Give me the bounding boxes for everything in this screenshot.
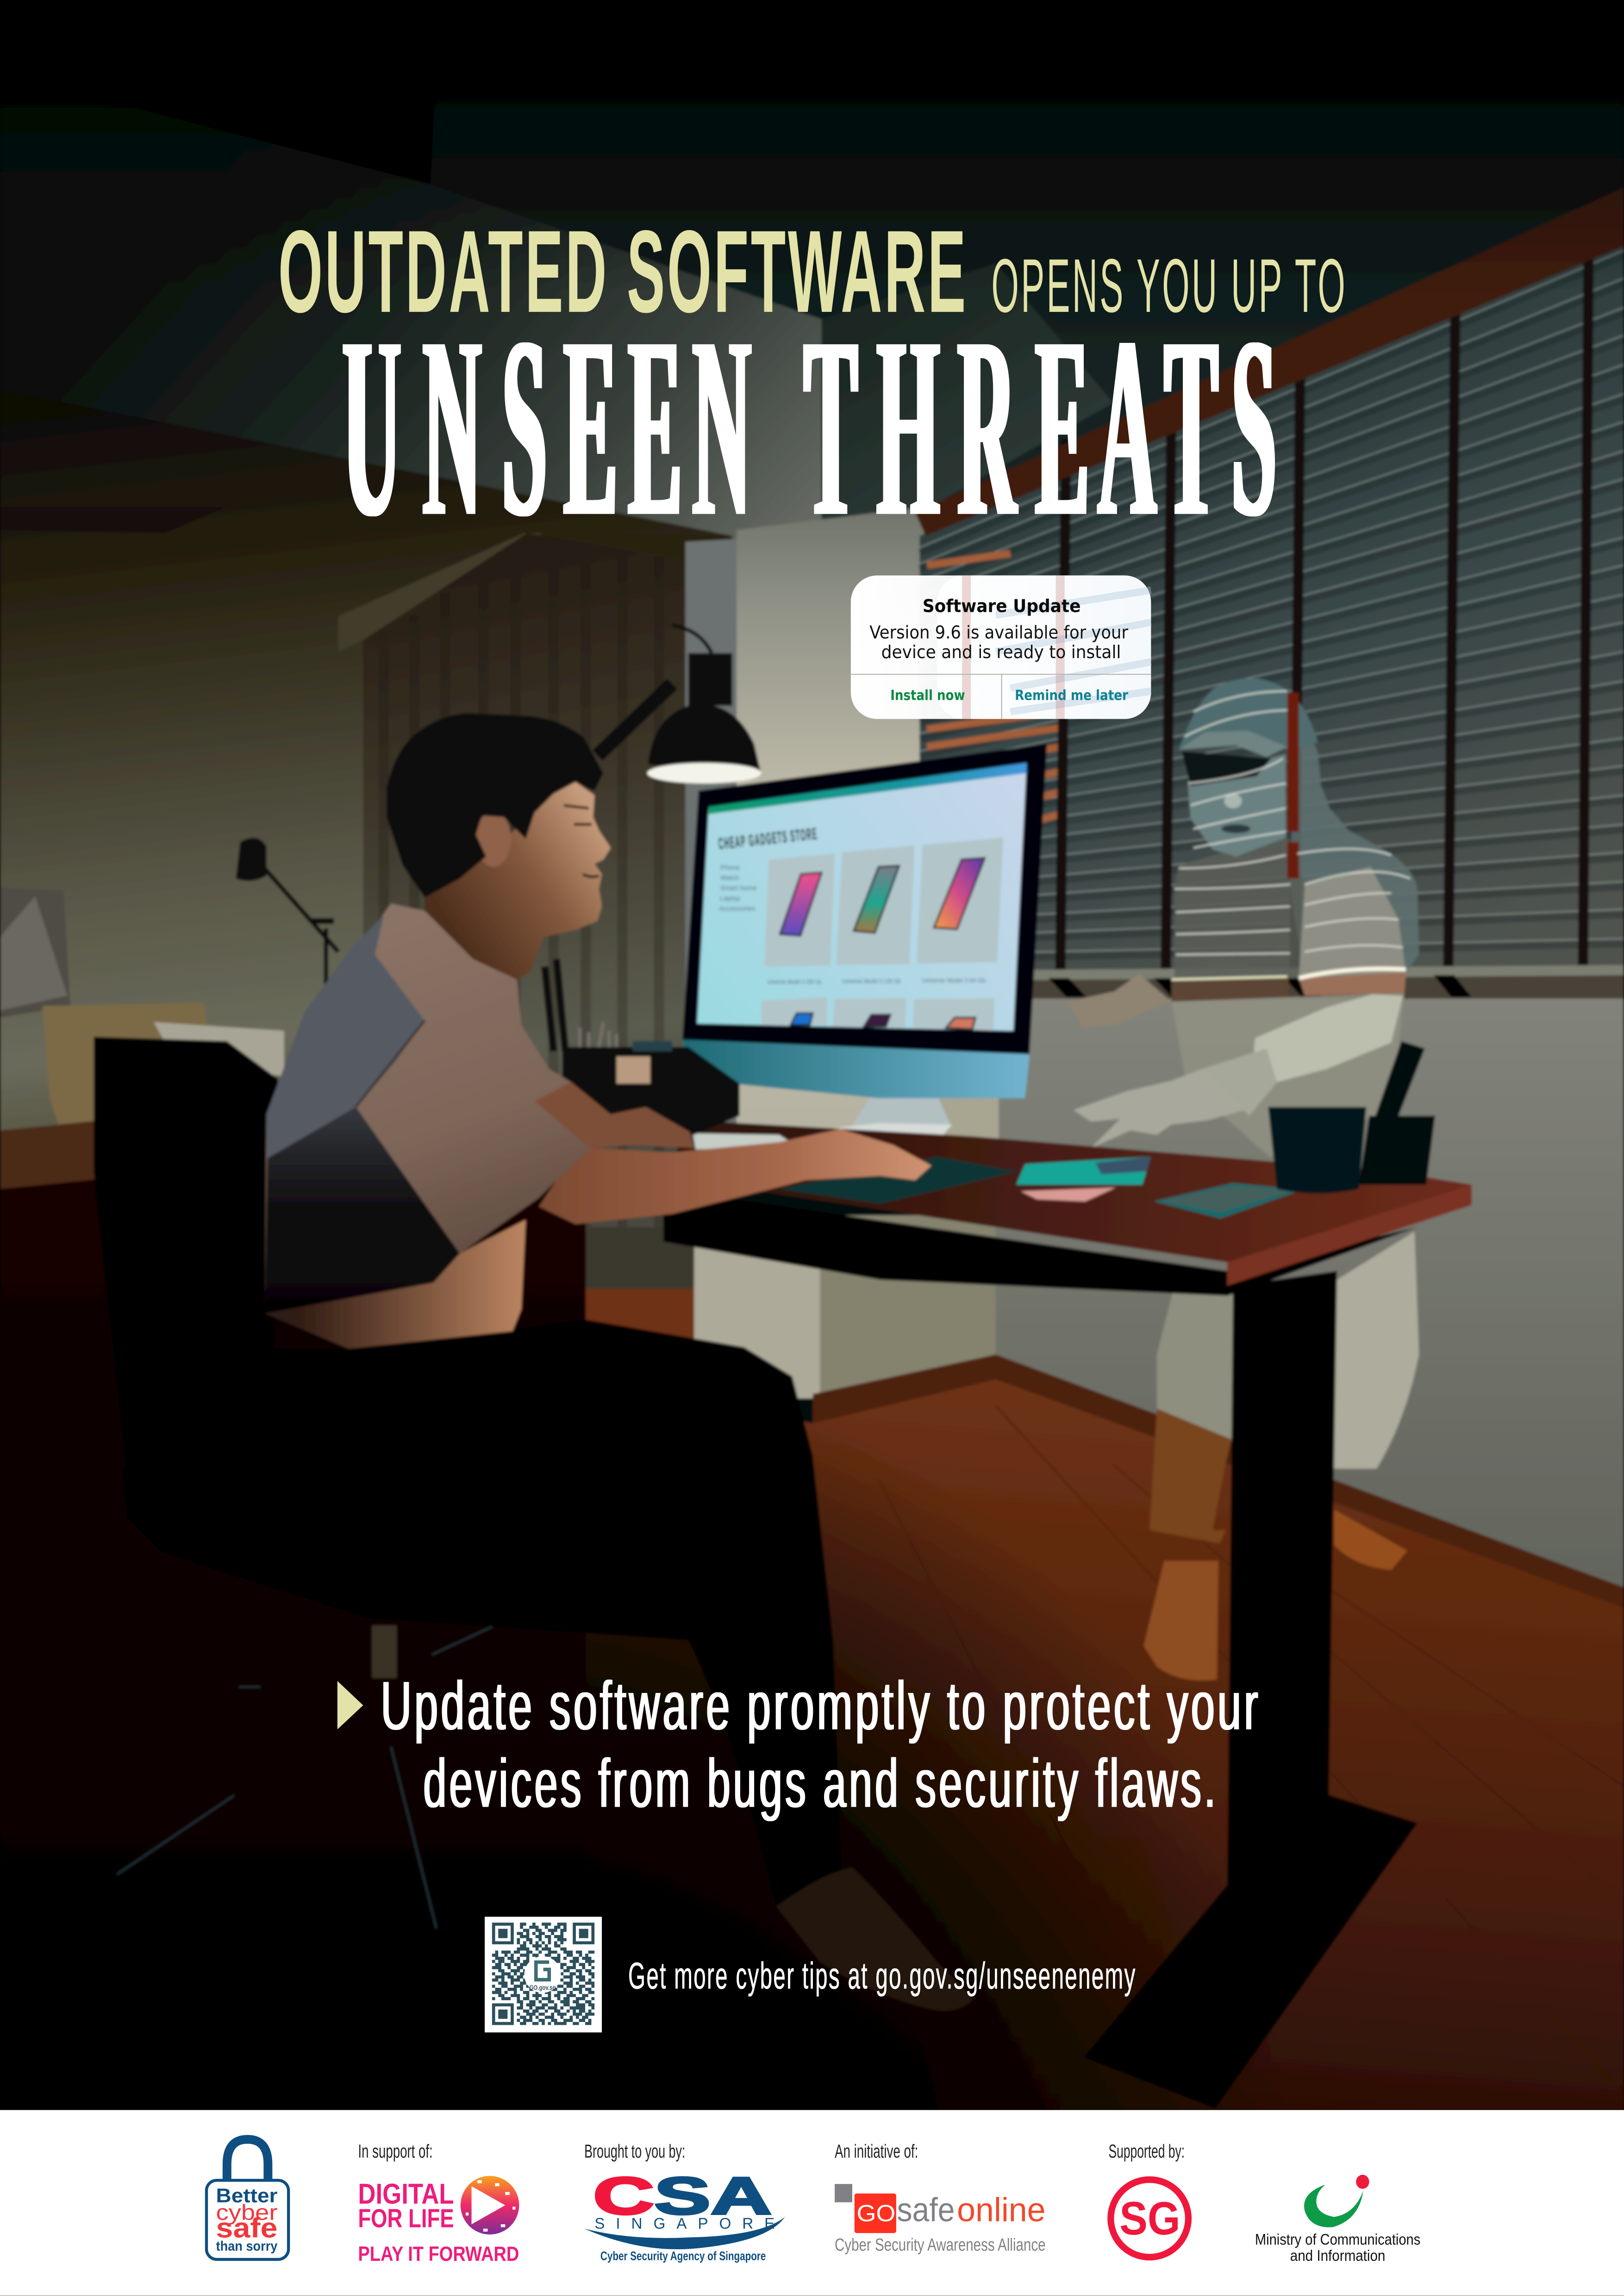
call to action text: [381, 1667, 1261, 1822]
logo: better cyber safe padlock: Better: [216, 2185, 277, 2207]
qr centre logo: [524, 1956, 561, 1993]
logo: better cyber safe padlock: [206, 2139, 288, 2259]
armchair: [0, 1003, 208, 1189]
product labels: Universe Model 3 64 Gb: [922, 977, 986, 984]
smartphone on desk: [1154, 1183, 1302, 1218]
man: facial details: [564, 805, 599, 877]
label: brought to you by: Brought to you by:: [584, 2140, 685, 2162]
product tiles: [762, 838, 1003, 1031]
sleeve seam: [356, 1020, 425, 1107]
man: hair: [387, 713, 603, 897]
sun stripes across ghost: [1174, 691, 1410, 955]
logo: digital for life: [358, 2176, 519, 2265]
hood and back of head: [1289, 709, 1419, 972]
ghost near sleeve: [1249, 994, 1403, 1116]
bright sill reflection: [1299, 969, 1406, 978]
dark left floor: [0, 1179, 586, 2110]
computer monitor: CHEAP GADGETS STORE: [718, 825, 818, 853]
popup title: Software Update: [923, 596, 1081, 616]
logo: digital for life: PLAY IT FORWARD: [358, 2243, 519, 2265]
skirting board: [813, 1355, 1624, 1608]
bare foot: [776, 1867, 974, 2011]
window glare behind popup: [937, 575, 1151, 719]
logo: digital for life: DIGITAL: [358, 2178, 454, 2210]
man: neck and face: [425, 782, 611, 980]
logo: go safe online: [835, 2184, 1046, 2255]
man: ear: [476, 811, 511, 867]
wallet and cash: [1016, 1157, 1151, 1201]
popup message: [869, 622, 1128, 662]
logo: digital for life: FOR LIFE: [358, 2203, 454, 2233]
screen menu: Laptop: [720, 895, 740, 902]
framed picture: [0, 887, 70, 1018]
ghost face: [1187, 754, 1286, 857]
phones on screen: [780, 858, 985, 1029]
mug: [1268, 1107, 1366, 1194]
top vignette: [0, 0, 1624, 293]
label: an initiative of: An initiative of:: [835, 2140, 918, 2162]
curtain: [363, 533, 685, 1318]
logo: ministry of communications and information: Ministry of Communications: [1255, 2231, 1420, 2248]
logo: go safe online: GO: [856, 2200, 895, 2227]
left wall with soffit shadow: [0, 390, 739, 1171]
ghost lower torso band: [1299, 972, 1406, 996]
button: install now: Install now: [890, 687, 965, 703]
label: supported by: Supported by:: [1109, 2140, 1185, 2162]
title line two: UNSEEN THREATS: [343, 283, 1276, 570]
qr code: [485, 1917, 602, 2032]
icon: arrow: [337, 1681, 363, 1730]
logo: go safe online: safe: [897, 2191, 955, 2229]
ghost leg over floor: [1149, 1409, 1231, 1543]
title block: [278, 206, 1347, 570]
ghost cap: [1179, 678, 1318, 750]
product labels: [768, 977, 986, 985]
website line: Get more cyber tips at go.gov.sg/unseenenemy: [628, 1955, 1137, 1997]
mousepad: [779, 1157, 1018, 1204]
keyboard: [693, 1133, 798, 1150]
floor lamp: [236, 838, 338, 984]
screen menu: Accessories: [719, 905, 756, 913]
ceiling fan shadow: [0, 507, 227, 533]
ghost torso: [1174, 834, 1305, 978]
ghost lower torso: [1172, 993, 1405, 1157]
lamp on desk: [598, 625, 762, 784]
button: remind me later: Remind me later: [1015, 687, 1128, 703]
popup panel: [851, 575, 1151, 719]
ghost nose: [1224, 794, 1242, 808]
ghost cuff: [1202, 1048, 1277, 1116]
screen menu: Smart home: [720, 885, 757, 892]
window blinds: [919, 220, 1624, 999]
screen menu: Watch: [720, 875, 739, 882]
ghost trousers right: [1334, 1232, 1419, 1468]
computer monitor: [682, 744, 1047, 1098]
pelmet shadow strip: [527, 533, 732, 560]
footer band: [0, 2110, 1624, 2296]
man: forearm and hand on mouse: [539, 1129, 931, 1224]
ghost near hand: [1074, 1069, 1245, 1148]
shadow under cap: [1182, 751, 1271, 786]
red strap across ghost: [1291, 693, 1295, 878]
desk leg and foot: [1084, 1271, 1418, 2109]
curtain pelmet: [338, 533, 543, 652]
ghost far hand: [1068, 974, 1172, 1028]
logo: ministry of communications and information: [1255, 2175, 1420, 2265]
ghost torso band left: [1172, 978, 1289, 1002]
ghost trousers left: [1157, 1286, 1233, 1439]
qr centre logo: GO.gov.sg: [530, 1985, 556, 1992]
popup dividers: [851, 674, 1151, 719]
curtain hem under desk: [578, 1227, 694, 1296]
wall return beside window: [822, 264, 1113, 536]
screen menu: [719, 864, 757, 913]
office chair: [94, 1037, 495, 1929]
logo: ministry of communications and information: and Information: [1290, 2247, 1385, 2265]
sun streaks through popup: [996, 590, 1151, 712]
wall corner beside curtain: [685, 539, 738, 1127]
chair base highlights: [117, 1625, 495, 1929]
orange beam above blinds: [915, 187, 1624, 536]
screen menu: Phone: [720, 864, 740, 871]
desk organiser: [545, 959, 739, 1135]
right upper wall: [431, 0, 1624, 516]
shaded wall under desk: [820, 1215, 996, 1403]
blind ladder tapes: [1060, 220, 1589, 984]
popup message: device and is ready to install: [881, 642, 1121, 662]
ghost shoulder: [1299, 867, 1406, 978]
logo: sg: [1111, 2179, 1188, 2257]
ghost visor: [1179, 731, 1287, 757]
left lower wall section: [923, 996, 999, 1157]
product labels: Universe Model 3 128 Gb: [842, 977, 901, 985]
blind bottom band: [919, 975, 1624, 999]
popup message: Version 9.6 is available for your: [869, 622, 1128, 642]
wooden floor: [527, 1288, 1624, 2110]
logo: better cyber safe padlock: than sorry: [216, 2239, 278, 2254]
shirt dark shadow band: [265, 1107, 460, 1313]
man: trousers: [122, 1319, 842, 1906]
logo: go safe online: Cyber Security Awareness Alliance: [835, 2235, 1046, 2255]
logo: csa singapore: [584, 2167, 785, 2263]
logo: csa singapore: SINGAPORE: [594, 2215, 775, 2232]
sunlit slats: [927, 554, 1060, 820]
call to action: [337, 1667, 1261, 1822]
lit wall under desk: [694, 1230, 820, 1399]
lower right wall: [996, 996, 1624, 1599]
logo: csa singapore: Cyber Security Agency of Singapore: [600, 2249, 766, 2263]
shirt lit hem: [265, 1220, 526, 1349]
shirt blue-grey shadow side: [267, 915, 425, 1158]
label: in support of: In support of:: [358, 2140, 433, 2162]
logo: csa singapore: C SA: [593, 2167, 772, 2226]
upper wall: [0, 73, 937, 556]
floor darkening towards the man: [0, 1318, 1624, 2110]
logo: go safe online: online: [957, 2191, 1046, 2229]
ghost figure: unseen threat: [1068, 678, 1419, 1680]
chair post: [372, 1625, 397, 1678]
monitor stand: [776, 1095, 952, 1145]
tape ends: [1049, 975, 1472, 997]
ghost shoes: [1143, 1561, 1218, 1680]
ghost lips: [1221, 824, 1250, 833]
desk: [663, 1120, 1472, 1296]
logo: better cyber safe padlock: safe: [216, 2212, 277, 2243]
cordless telephone: [1359, 1041, 1435, 1185]
man: t-shirt: [265, 903, 590, 1349]
cushion: [154, 1022, 284, 1076]
lit wall column beside window: [737, 505, 937, 1157]
product labels: Universe Model 3 256 Gb: [768, 978, 822, 985]
man: far arm: [535, 1082, 694, 1148]
window sill: [919, 965, 1624, 981]
logo: sg: SG: [1119, 2192, 1181, 2245]
software update popup: [851, 575, 1151, 719]
logo: better cyber safe padlock: cyber: [216, 2200, 278, 2225]
